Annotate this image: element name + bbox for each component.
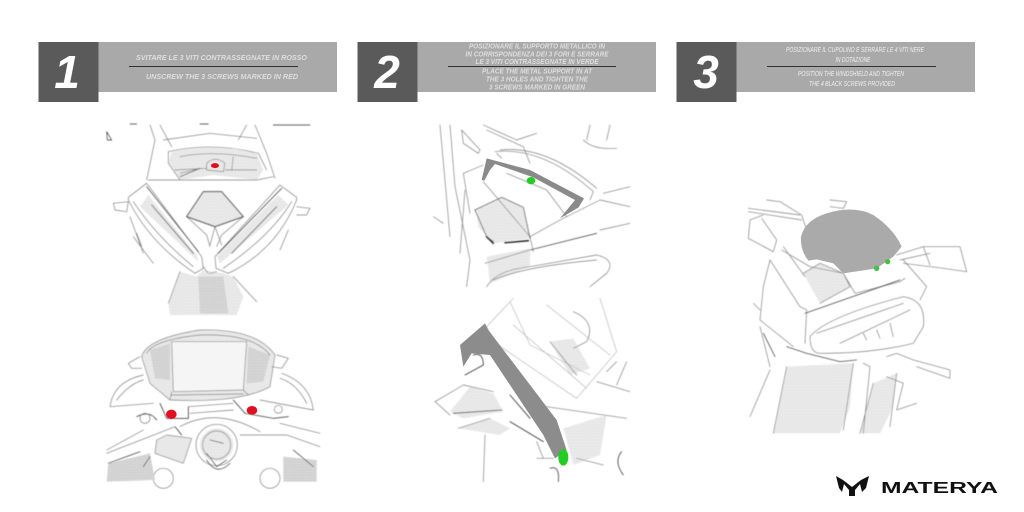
photo: instrument dash with two red screws [107, 330, 320, 488]
logo wordmark: MATERYA [881, 480, 999, 497]
logo mark [836, 476, 869, 496]
step 1 italian instruction: SVITARE LE 3 VITI CONTRASSEGNATE IN ROSSO [136, 55, 308, 62]
step 2 header: 3 SCREWS MARKED IN GREEN [489, 84, 586, 92]
green screw markers [874, 266, 879, 271]
side bracket [460, 323, 567, 458]
photo: headlight cowl with one red screw [107, 124, 310, 315]
photo: side view of bracket with green screw [435, 298, 630, 482]
photo: motorcycle with windshield mounted [748, 200, 967, 433]
step 2 header [358, 42, 656, 102]
step 2 italian instruction: POSIZIONARE IL SUPPORTO METALLICO IN [469, 44, 606, 50]
step 3 header: THE 4 BLACK SCREWS PROVIDED [809, 79, 895, 88]
step number 2: 2 [373, 46, 400, 98]
step 1 english instruction: UNSCREW THE 3 SCREWS MARKED IN RED [146, 74, 298, 81]
red screw markers [166, 410, 177, 419]
brand logo [836, 476, 999, 497]
step 3 header [676, 42, 975, 102]
step 2 english instruction: PLACE THE METAL SUPPORT IN AT [482, 68, 593, 76]
photo: metal support bracket with green screw [433, 125, 630, 287]
step number 1: 1 [54, 46, 80, 98]
metal support bracket [482, 158, 584, 218]
green screw marker [558, 449, 568, 466]
windshield [801, 210, 902, 273]
step 2 header: THE 3 HOLES AND TIGHTEN THE [486, 76, 588, 84]
red screw marker [211, 163, 219, 168]
step 2 header: IN CORRISPONDENZA DEI 3 FORI E SERRARE [466, 52, 609, 58]
step 3 italian instruction: POSIZIONARE IL CUPOLINO E SERRARE LE 4 VITI NERE [786, 45, 925, 54]
step 2 header: LE 3 VITI CONTRASSEGNATE IN VERDE [476, 59, 599, 66]
step 3 english instruction: POSITION THE WINDSHIELD AND TIGHTEN [798, 69, 904, 78]
green screw marker [527, 177, 535, 184]
step 3 header: IN DOTAZIONE [836, 55, 871, 64]
step number 3: 3 [693, 46, 719, 98]
step 1 header [38, 42, 337, 102]
